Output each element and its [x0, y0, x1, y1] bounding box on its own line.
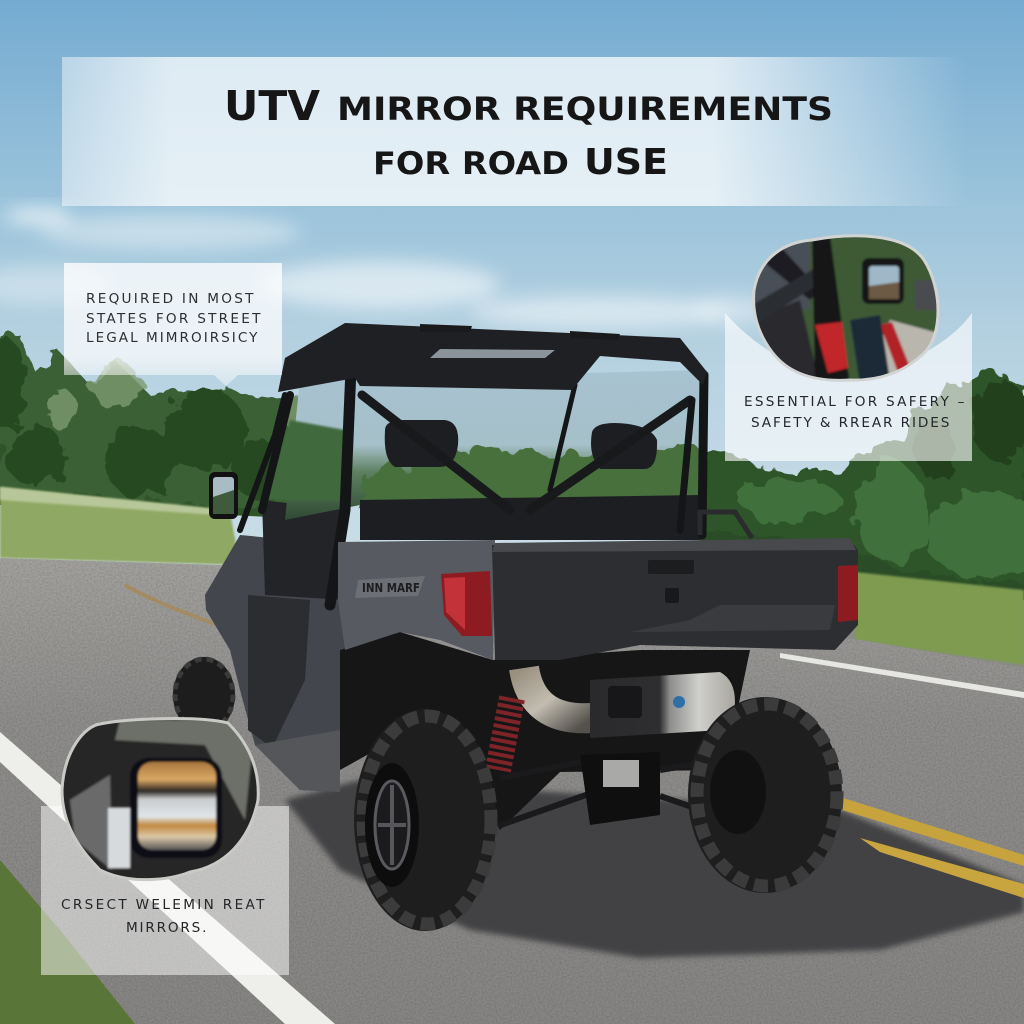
callout bottom-left — [41, 715, 289, 975]
title: USE — [584, 142, 668, 183]
bottom-left grass verge — [0, 860, 135, 1024]
title: UTV — [224, 82, 320, 130]
cab opening — [262, 500, 345, 600]
callout bottom-left: MIRRORS. — [126, 920, 207, 936]
control arms — [498, 760, 730, 826]
inset photo: mirror on roll bar — [750, 230, 945, 385]
side mirror — [209, 472, 238, 519]
tailgate — [492, 540, 858, 660]
bed side panel — [338, 540, 495, 660]
side step — [255, 730, 340, 792]
front fender and cab side — [205, 535, 345, 792]
title band — [62, 57, 967, 206]
roof panel — [278, 323, 707, 392]
rear rack rail — [700, 512, 752, 538]
title — [224, 82, 833, 183]
callout top-left: STATES FOR STREET — [86, 311, 261, 327]
callout top-left: REQUIRED IN MOST — [86, 291, 254, 307]
cab door — [248, 595, 310, 748]
road shadow — [285, 780, 1024, 958]
far front tire — [173, 657, 235, 733]
background: grass — [0, 487, 1024, 665]
road — [0, 558, 1024, 1024]
background: tree line right — [700, 372, 1024, 600]
near rear tire — [354, 709, 496, 931]
callout top-left: LEGAL MIMROIRSICY — [86, 330, 258, 346]
inset photo: rear mirror — [60, 717, 260, 882]
bed logo: INN MARF — [362, 581, 420, 595]
callout bottom-left: CRSECT WELEMIN REAT — [61, 897, 265, 913]
X brace — [362, 395, 690, 510]
roll cage — [240, 345, 704, 605]
road surface texture — [0, 550, 1024, 1024]
callout top-right: SAFETY & RREAR RIDES — [751, 415, 950, 431]
taillights — [441, 565, 858, 636]
bed logo — [355, 576, 425, 598]
clouds — [0, 209, 770, 328]
exhaust and muffler — [524, 668, 735, 738]
callout top-right — [725, 230, 972, 461]
callout top-left — [64, 263, 282, 386]
undercarriage — [340, 632, 750, 830]
seats — [360, 420, 700, 540]
road markings — [0, 585, 1024, 1024]
rear differential and plate — [580, 752, 660, 825]
rear window view — [285, 370, 705, 520]
red suspension springs — [498, 698, 738, 775]
background: sky — [0, 0, 1024, 600]
UTV vehicle — [173, 323, 858, 931]
far rear tire — [688, 697, 842, 893]
callout top-right: ESSENTIAL FOR SAFERY – — [744, 394, 965, 410]
cab side window trees — [265, 420, 345, 500]
title: FOR ROAD — [373, 146, 569, 182]
far background trees through window — [360, 445, 700, 510]
title: MIRROR REQUIREMENTS — [337, 90, 833, 128]
background: tree line left — [0, 335, 340, 520]
